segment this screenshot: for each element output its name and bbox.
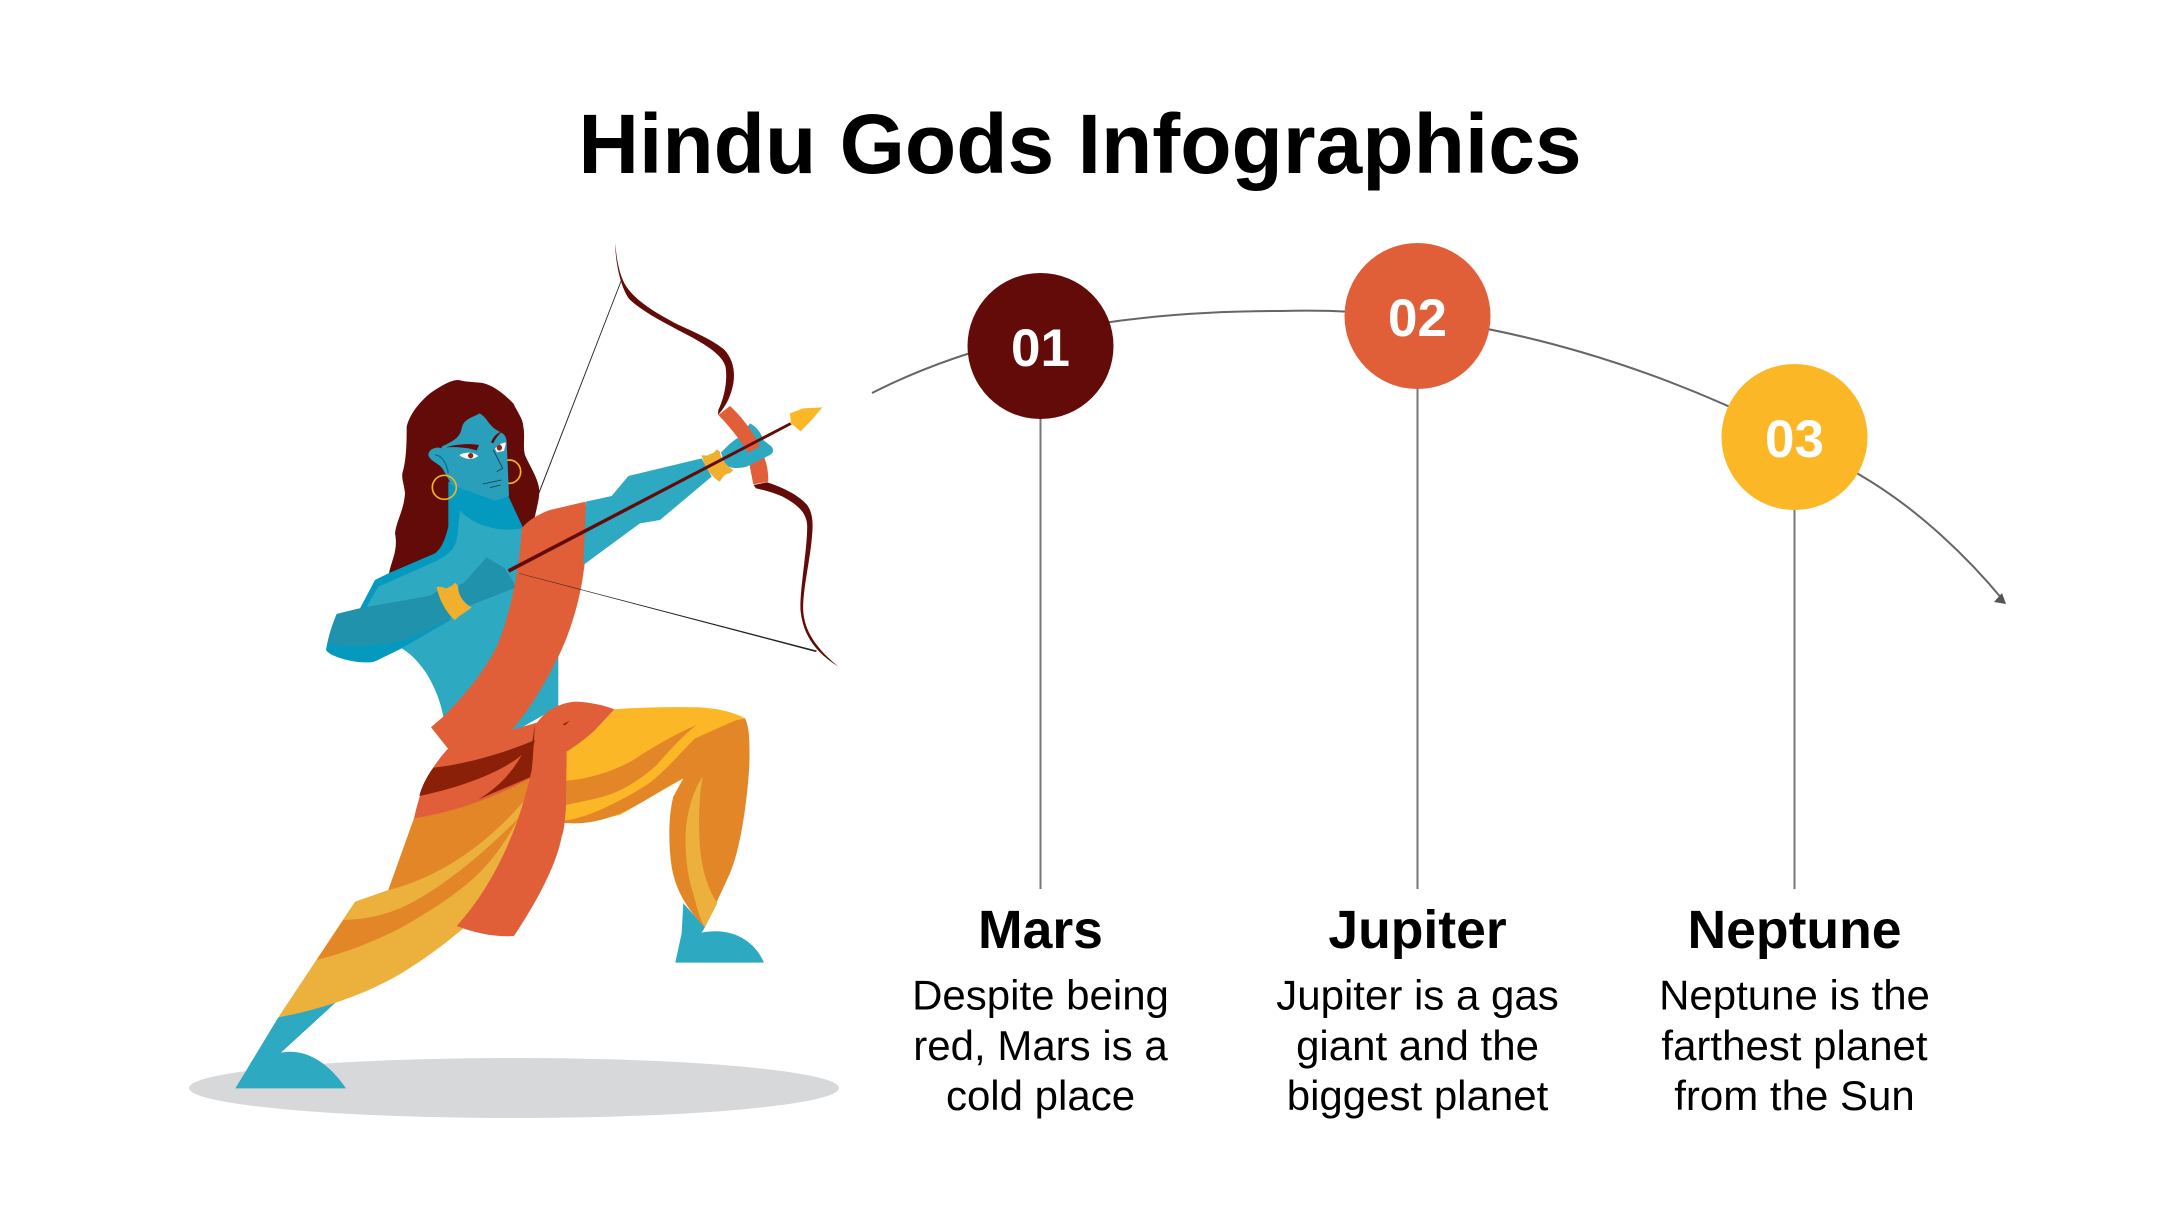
text block: Mars: Mars <box>978 901 1103 960</box>
sash <box>431 502 587 767</box>
irises <box>468 445 502 458</box>
text block: Neptune: Neptune <box>1688 901 1902 960</box>
right thigh <box>565 707 745 823</box>
bow lower limb <box>754 482 838 667</box>
text block: Jupiter: biggest planet <box>1287 1072 1549 1119</box>
thigh lower rim <box>563 738 702 823</box>
cloth upper <box>388 777 532 890</box>
connector lines <box>1040 370 1794 889</box>
text block: Jupiter: Jupiter is a gas <box>1276 972 1559 1018</box>
wrist bangle <box>702 449 733 482</box>
cloth notch <box>563 721 570 725</box>
drawing forearm <box>327 557 517 646</box>
bow grip lower <box>749 457 768 484</box>
text block: Jupiter <box>1276 901 1559 1119</box>
shoulder and lower forearm shade <box>326 482 523 662</box>
bowstring lower <box>519 573 817 652</box>
hair <box>389 380 539 573</box>
curved timeline arrow <box>872 311 2006 604</box>
text block: Mars: cold place <box>946 1072 1135 1119</box>
torso <box>367 510 558 740</box>
title: Hindu Gods Infographics <box>578 97 1582 191</box>
belt bands <box>419 740 535 796</box>
cloth fold <box>317 818 518 960</box>
drawing bangle <box>437 583 472 620</box>
bow upper limb <box>615 243 734 415</box>
torso and drawing arm <box>326 482 587 767</box>
text block: Jupiter: Jupiter <box>1328 901 1507 960</box>
cloth base <box>278 777 532 1017</box>
node 03: 03 <box>1765 410 1824 469</box>
front foot <box>235 1002 346 1088</box>
belt block <box>414 722 540 818</box>
eyebrows <box>446 431 502 451</box>
extended arm and arrow <box>508 406 822 573</box>
text block: Mars: Despite being <box>912 972 1169 1018</box>
node 02 <box>1344 243 1490 389</box>
text block: Mars: red, Mars is a <box>913 1022 1168 1069</box>
bow grip upper <box>718 406 760 453</box>
far earring <box>498 460 521 483</box>
arm <box>583 458 712 565</box>
text block: Neptune: Neptune is the <box>1659 972 1930 1018</box>
eyes <box>459 443 506 459</box>
ear line <box>435 455 448 473</box>
bowstring upper <box>539 280 622 493</box>
calf highlight <box>686 777 717 927</box>
node 01 <box>968 273 1114 419</box>
text block: Neptune: farthest planet <box>1661 1022 1928 1069</box>
face <box>428 413 509 501</box>
node 02: 02 <box>1388 289 1447 348</box>
back calf <box>669 718 750 927</box>
bow <box>539 243 838 667</box>
back foot <box>675 903 764 963</box>
ground shadow <box>189 1058 839 1118</box>
node 03 <box>1722 364 1868 510</box>
arrow head <box>790 407 822 431</box>
text block: Mars <box>912 901 1169 1119</box>
nose and mouth lines <box>483 450 503 488</box>
thigh fold <box>566 725 697 805</box>
text block: Jupiter: giant and the <box>1296 1022 1539 1069</box>
text block: Neptune: from the Sun <box>1674 1072 1915 1119</box>
hips and back leg <box>414 702 764 963</box>
hand <box>721 423 773 468</box>
arrow shaft <box>508 422 792 573</box>
node 01: 01 <box>1011 319 1070 378</box>
hanging cloth <box>457 702 614 936</box>
text block: Neptune <box>1659 901 1930 1119</box>
head <box>428 413 521 501</box>
front leg <box>235 777 532 1088</box>
near earring <box>432 475 456 499</box>
